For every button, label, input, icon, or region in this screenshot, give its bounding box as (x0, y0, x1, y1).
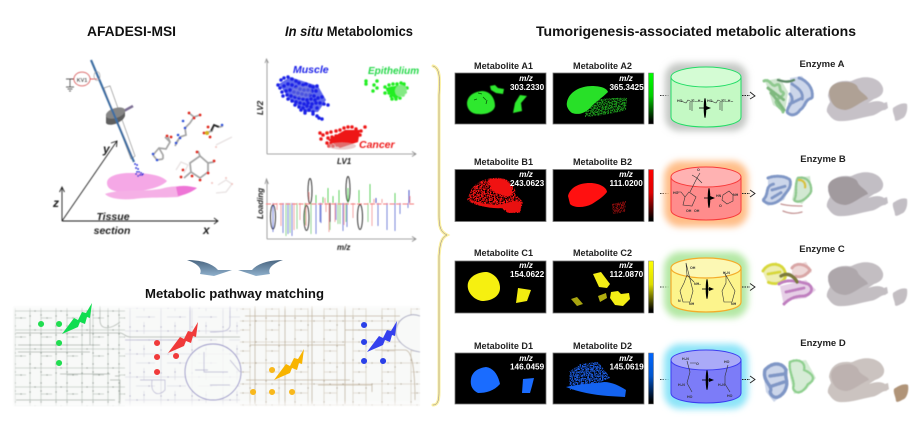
cylinder B: HN (716, 194, 722, 198)
label: Metabolite A2: Metabolite A2 (573, 61, 632, 72)
connector C right (742, 284, 755, 290)
cylinder D: H₂N (718, 383, 725, 387)
axes (265, 59, 416, 156)
connector D right (742, 376, 755, 383)
colour scale A (648, 73, 654, 124)
panel: AFADESI-MSI schematic (52, 60, 232, 237)
label: Tissue section: Tissue (96, 211, 130, 223)
axes (265, 179, 416, 242)
cylinder D: HO (727, 394, 733, 398)
cylinder C: NH (689, 302, 695, 306)
cylinder B: OH (686, 209, 692, 213)
image: Metabolite B2: m/z (619, 170, 634, 179)
image: Metabolite B2 (553, 170, 644, 222)
image: Metabolite A2 (553, 73, 644, 124)
label: Metabolite A1: Metabolite A1 (474, 61, 534, 72)
image: Metabolite A1: 303.2330 (510, 83, 545, 92)
cluster: Cancer (320, 127, 365, 150)
protein D (763, 360, 816, 402)
image: Metabolite C2: 112.0870 (610, 270, 644, 279)
image: Metabolite C2: m/z (619, 261, 634, 270)
image: Metabolite A2: m/z (619, 74, 634, 83)
label: Metabolite B2: Metabolite B2 (573, 157, 632, 168)
axis label LV1: LV1 (337, 157, 352, 166)
green markers (41, 303, 92, 363)
axis label y: y (102, 142, 111, 156)
spray droplets (135, 164, 143, 176)
cylinder B: OH (694, 209, 700, 213)
image: Metabolite A2: 365.3425 (610, 83, 644, 92)
voltage source KV1: KV1 (77, 78, 87, 84)
right arrow (238, 260, 283, 276)
voltage source KV1 (66, 72, 100, 91)
cluster: Muscle (278, 77, 328, 119)
axis label Loading: Loading (256, 188, 265, 219)
cylinder A (665, 63, 747, 131)
cylinder D: HO (687, 395, 693, 399)
cylinder C: H₂N (723, 271, 730, 275)
cylinder C: N (678, 299, 681, 303)
cylinder B: NH (733, 193, 739, 197)
title: In situ Metabolomics: In situ Metabolomics (285, 23, 413, 39)
colour scale C (648, 261, 654, 313)
image: Metabolite D1: m/z (519, 354, 534, 363)
image: Metabolite C1: 154.0622 (510, 270, 545, 279)
row D (455, 338, 908, 409)
image: Metabolite C1 (455, 261, 546, 313)
label: Metabolite C1: Metabolite C1 (474, 248, 534, 259)
label: Cancer: Cancer (359, 139, 396, 151)
cylinder D: O (696, 362, 699, 366)
tissue stain B (827, 172, 907, 216)
cylinder A: C₁₅H₃₁ (692, 99, 704, 103)
image: Metabolite D2: 145.0619 (610, 362, 644, 372)
heading: Metabolic pathway matching: Metabolic pathway matching (145, 286, 324, 301)
arrows converging (187, 260, 283, 276)
label: Muscle: Muscle (293, 64, 329, 76)
image: Metabolite A1: m/z (519, 74, 534, 83)
cylinder C: NH₂ (694, 282, 701, 286)
brace (433, 66, 447, 405)
connector A left (660, 94, 670, 96)
cylinder B: O (719, 204, 722, 208)
title: AFADESI-MSI: AFADESI-MSI (87, 23, 176, 39)
image: Metabolite D2: m/z (619, 354, 634, 363)
tissue stain D (828, 358, 908, 402)
panel: score plot (256, 59, 419, 166)
pathway background (13, 304, 420, 408)
label: Enzyme B: Enzyme B (800, 154, 846, 165)
row A (455, 59, 907, 131)
label: Metabolite B1: Metabolite B1 (474, 157, 534, 168)
cylinder D (664, 344, 748, 409)
label: Enzyme A: Enzyme A (799, 59, 845, 70)
blue markers (364, 321, 397, 361)
image: Metabolite B1: 243.0623 (510, 179, 545, 188)
cylinder C (664, 252, 748, 318)
tissue stain A (827, 77, 907, 121)
cylinder B: O (697, 168, 700, 172)
protein B (762, 176, 812, 213)
label: Metabolite C2: Metabolite C2 (573, 248, 632, 259)
label: Tissue section: section (94, 225, 130, 237)
cylinder D: H₂N (678, 383, 685, 387)
image: Metabolite A1 (455, 73, 546, 124)
title: Tumorigenesis-associated metabolic alterations: Tumorigenesis-associated metabolic alterations (536, 23, 856, 39)
cylinder B (664, 161, 748, 227)
highlighted peaks (270, 176, 362, 230)
connector C left (660, 286, 670, 288)
axis label z: z (52, 196, 59, 210)
row B (455, 154, 907, 227)
sprayer sleeve (104, 86, 135, 159)
left arrow (187, 260, 232, 276)
row C (455, 244, 907, 318)
cylinder D: HO (724, 360, 730, 364)
cluster: Epithelium (366, 81, 407, 99)
tissue stain C (827, 262, 907, 306)
orange markers (253, 349, 304, 392)
axis label x: x (202, 223, 211, 237)
capillary (91, 60, 134, 162)
label: Metabolite D1: Metabolite D1 (474, 341, 534, 352)
image: Metabolite B2: 111.0200 (610, 179, 643, 188)
connector B right (742, 190, 755, 197)
protein A (764, 76, 813, 117)
colour scale D (648, 353, 654, 404)
axis label m/z: m/z (337, 243, 350, 252)
connector A right (742, 92, 755, 99)
label: Enzyme D: Enzyme D (800, 338, 846, 349)
cylinder C: NH (731, 302, 737, 306)
connector D left (660, 378, 670, 380)
sprayer nebulizer disc (104, 105, 133, 125)
label: Metabolite D2: Metabolite D2 (573, 341, 632, 352)
colour scale B (648, 170, 654, 222)
tissue section (105, 173, 197, 199)
label: Epithelium: Epithelium (368, 66, 419, 77)
cylinder A: C₁₅H₃₁ (722, 99, 734, 103)
image: Metabolite C1: m/z (519, 261, 534, 270)
axes x y z (60, 141, 218, 224)
image: Metabolite B1: m/z (519, 170, 534, 179)
cylinder D: H₂N (682, 357, 689, 361)
label: Enzyme C: Enzyme C (799, 244, 845, 255)
panel: metabolic pathway map (13, 303, 420, 408)
image: Metabolite D2 (553, 353, 644, 404)
image: Metabolite D1 (455, 353, 546, 404)
cylinder C: OH (690, 266, 696, 270)
molecules ball and stick (153, 113, 232, 193)
image: Metabolite B1 (455, 170, 546, 222)
image: Metabolite D1: 146.0459 (510, 362, 545, 372)
axis label LV2: LV2 (256, 100, 265, 115)
red markers (157, 322, 198, 372)
panel: loading plot (256, 176, 416, 252)
cylinder A: HO (707, 99, 713, 103)
cylinder A: HO (677, 99, 683, 103)
loading bars (266, 184, 414, 236)
connector B left (660, 192, 670, 194)
image: Metabolite C2 (553, 261, 644, 313)
protein C (762, 262, 816, 306)
cylinder B: HO (673, 191, 679, 195)
